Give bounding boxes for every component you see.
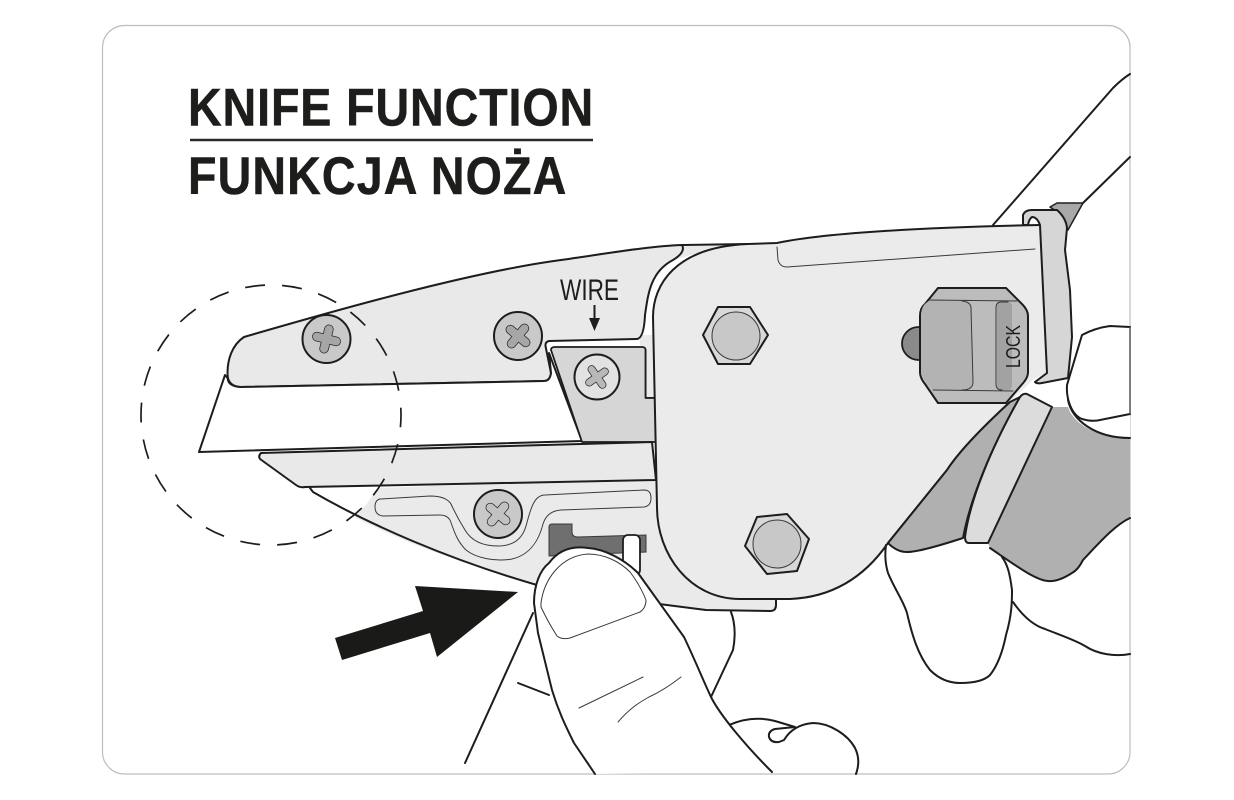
knife slider [549,524,646,575]
right hand: thumb [1067,326,1130,438]
right hand: index finger outline [885,545,1012,683]
hex bolt 2 [745,514,809,574]
panel: rounded frame [102,26,1130,774]
title: KNIFE FUNCTION [188,78,594,137]
grip: light band [965,394,1052,543]
body crease [777,247,1035,267]
right hand: index finger [885,538,1012,683]
title: FUNKCJA NOŻA [188,146,567,206]
dashed detail circle [141,285,401,545]
screw 1 [302,315,350,363]
wire label: WIRE [560,274,619,307]
wire arrow [589,305,600,331]
right hand: lower finger line [1013,602,1130,655]
big black arrow [335,586,518,660]
grip: right grey section [988,407,1130,581]
thumb creases [579,677,681,722]
left hand: palm and fold [729,719,858,774]
thumb nail [541,554,646,639]
grey wedge behind blade [551,347,656,442]
hex bolt 1 [703,307,768,364]
lock label: LOCK [1003,324,1025,368]
upper jaw [228,244,748,399]
thumb of left hand [534,547,772,774]
lower blade bar [259,442,656,487]
screw 3 [574,354,620,400]
tool body [653,225,1048,599]
lower jaw slot outline [375,490,651,560]
title [188,78,594,206]
grip: left grey section [888,397,1020,552]
white blade [199,353,582,452]
handle collar [1023,210,1072,383]
lock switch [902,288,1028,403]
left hand: back finger [465,612,735,763]
right hand: upper handle lines [993,74,1130,230]
screw 2 [494,312,542,360]
grip lower outline [990,518,1130,581]
screw 4 [474,490,522,538]
lower jaw plate [310,470,776,611]
